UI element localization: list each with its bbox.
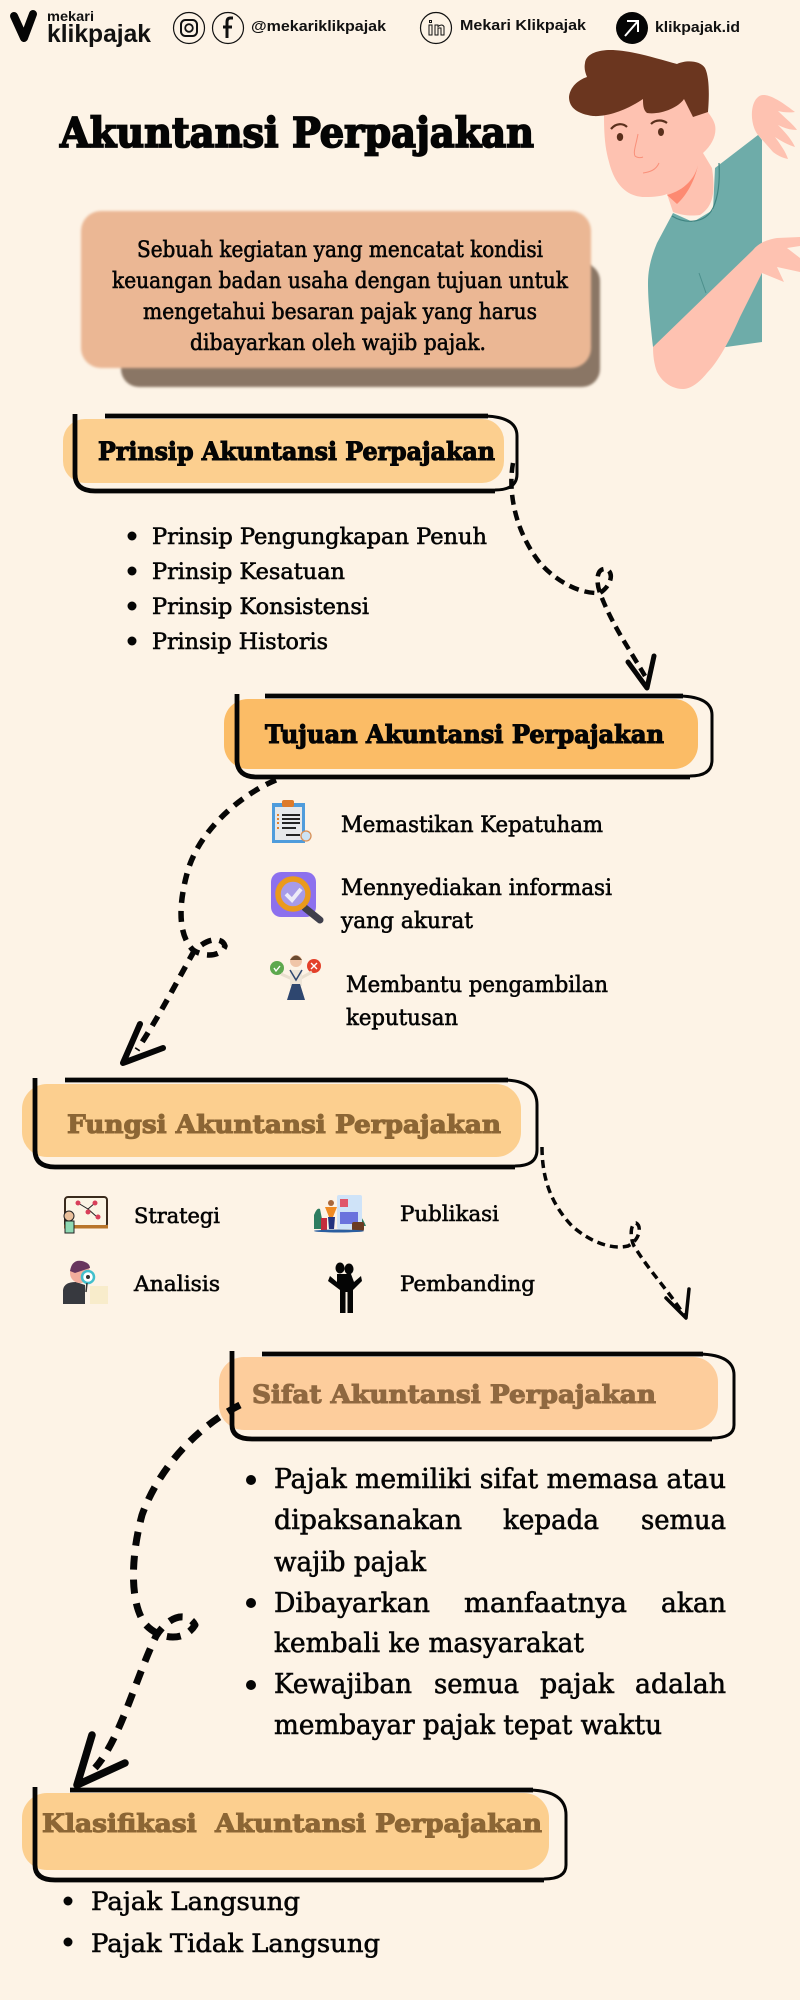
list: prinsip: Prinsip Konsistensi: [152, 595, 369, 620]
item: analisis: [63, 1261, 220, 1304]
illustration: man peeking: [569, 50, 800, 389]
item: memastikan: Memastikan Kepatuham: [341, 813, 603, 838]
icon: website arrow: [616, 12, 648, 44]
list: sifat: dipaksanakan: [274, 1505, 462, 1536]
item: informasi: yang akurat: [340, 909, 473, 934]
list: sifat: wajib pajak: [274, 1547, 427, 1578]
heading: tujuan: [224, 694, 712, 777]
item: pembanding: Pembanding: [400, 1272, 535, 1296]
icon: facebook: [212, 12, 244, 44]
arrow: prinsip to tujuan: [511, 463, 654, 688]
heading: prinsip: [63, 414, 517, 491]
heading: sifat: Sifat Akuntansi Perpajakan: [252, 1380, 656, 1409]
list: sifat: kepada: [503, 1505, 599, 1536]
list: klasifikasi: Pajak Langsung: [91, 1887, 300, 1916]
heading: sifat: [219, 1351, 734, 1439]
list: klasifikasi: [64, 1887, 380, 1958]
section: tujuan: [224, 694, 712, 1031]
list: sifat: Dibayarkan: [274, 1588, 430, 1619]
list: sifat: semua: [641, 1505, 726, 1536]
box: [81, 211, 591, 368]
section: sifat: [219, 1351, 734, 1741]
list: sifat: semua: [434, 1669, 519, 1700]
icon: instagram: [174, 12, 204, 44]
list: sifat: membayar pajak tepat waktu: [274, 1710, 662, 1741]
list: sifat: Pajak memiliki sifat memasa atau: [274, 1464, 726, 1495]
box shadow: [121, 263, 600, 387]
list: sifat: manfaatnya: [464, 1588, 627, 1619]
definition text: Sebuah kegiatan yang mencatat kondisi: [137, 238, 543, 263]
item: informasi: [271, 872, 612, 934]
heading: klasifikasi: [22, 1787, 566, 1880]
handle text: @mekariklikpajak: [251, 18, 387, 35]
panel: definition: [81, 211, 600, 387]
item: strategi: Strategi: [134, 1204, 220, 1228]
arrow: fungsi to sifat: [542, 1147, 689, 1318]
list: sifat: akan: [661, 1588, 726, 1619]
section: prinsip: [63, 414, 517, 655]
section: klasifikasi: [22, 1787, 566, 1958]
item: keputusan: Membantu pengambilan: [346, 973, 608, 998]
icon: publication: [314, 1195, 366, 1232]
item: analisis: Analisis: [133, 1272, 220, 1296]
list: sifat: pajak: [540, 1669, 615, 1700]
list: prinsip: Prinsip Historis: [152, 630, 328, 655]
logo: mekari klikpajak: [14, 8, 151, 48]
definition text: dibayarkan oleh wajib pajak.: [190, 331, 486, 356]
header bar: [14, 8, 740, 48]
list: sifat: adalah: [635, 1669, 726, 1700]
heading: tujuan: Tujuan Akuntansi Perpajakan: [265, 720, 664, 749]
item: memastikan: [272, 800, 603, 843]
icon: confused silhouette: [328, 1262, 362, 1313]
item: informasi: Mennyediakan informasi: [341, 876, 612, 901]
list: prinsip: [128, 525, 487, 655]
title: Akuntansi Perpajakan: [59, 109, 534, 157]
list: prinsip: Prinsip Pengungkapan Penuh: [152, 525, 487, 550]
item: keputusan: keputusan: [346, 1006, 458, 1031]
icon: analyst with magnifier: [63, 1261, 108, 1304]
list: sifat: Kewajiban: [274, 1669, 412, 1700]
item: publikasi: [314, 1195, 499, 1232]
linkedin text: Mekari Klikpajak: [460, 17, 587, 34]
arrow: tujuan to fungsi: [123, 780, 276, 1063]
item: strategi: [64, 1197, 220, 1233]
definition text: [112, 238, 569, 356]
logo: mekari klikpajak: klikpajak: [47, 20, 151, 48]
item: publikasi: Publikasi: [400, 1202, 499, 1226]
heading: prinsip: Prinsip Akuntansi Perpajakan: [98, 437, 495, 466]
icon: linkedin: [420, 12, 452, 44]
website text: klikpajak.id: [655, 19, 740, 36]
list: prinsip: Prinsip Kesatuan: [152, 560, 345, 585]
icon: girl with choices: [270, 955, 321, 1000]
item: keputusan: [270, 955, 608, 1031]
section: fungsi: [22, 1078, 537, 1313]
list: sifat: [246, 1464, 726, 1741]
heading: fungsi: Fungsi Akuntansi Perpajakan: [67, 1110, 501, 1139]
definition text: mengetahui besaran pajak yang harus: [143, 300, 537, 325]
icon: compliance clipboard: [272, 800, 311, 843]
item: pembanding: [328, 1262, 535, 1313]
arrow: sifat to klasifikasi: [77, 1405, 240, 1785]
heading: fungsi: [22, 1078, 537, 1167]
list: sifat: kembali ke masyarakat: [274, 1628, 584, 1659]
icon: magnifier check: [271, 872, 320, 920]
list: klasifikasi: Pajak Tidak Langsung: [91, 1929, 380, 1958]
logo: mekari klikpajak: mekari: [47, 8, 94, 24]
icon: strategy board: [64, 1197, 108, 1233]
definition text: keuangan badan usaha dengan tujuan untuk: [112, 269, 569, 294]
heading: klasifikasi: Klasifikasi Akuntansi Perpajakan: [42, 1809, 542, 1838]
